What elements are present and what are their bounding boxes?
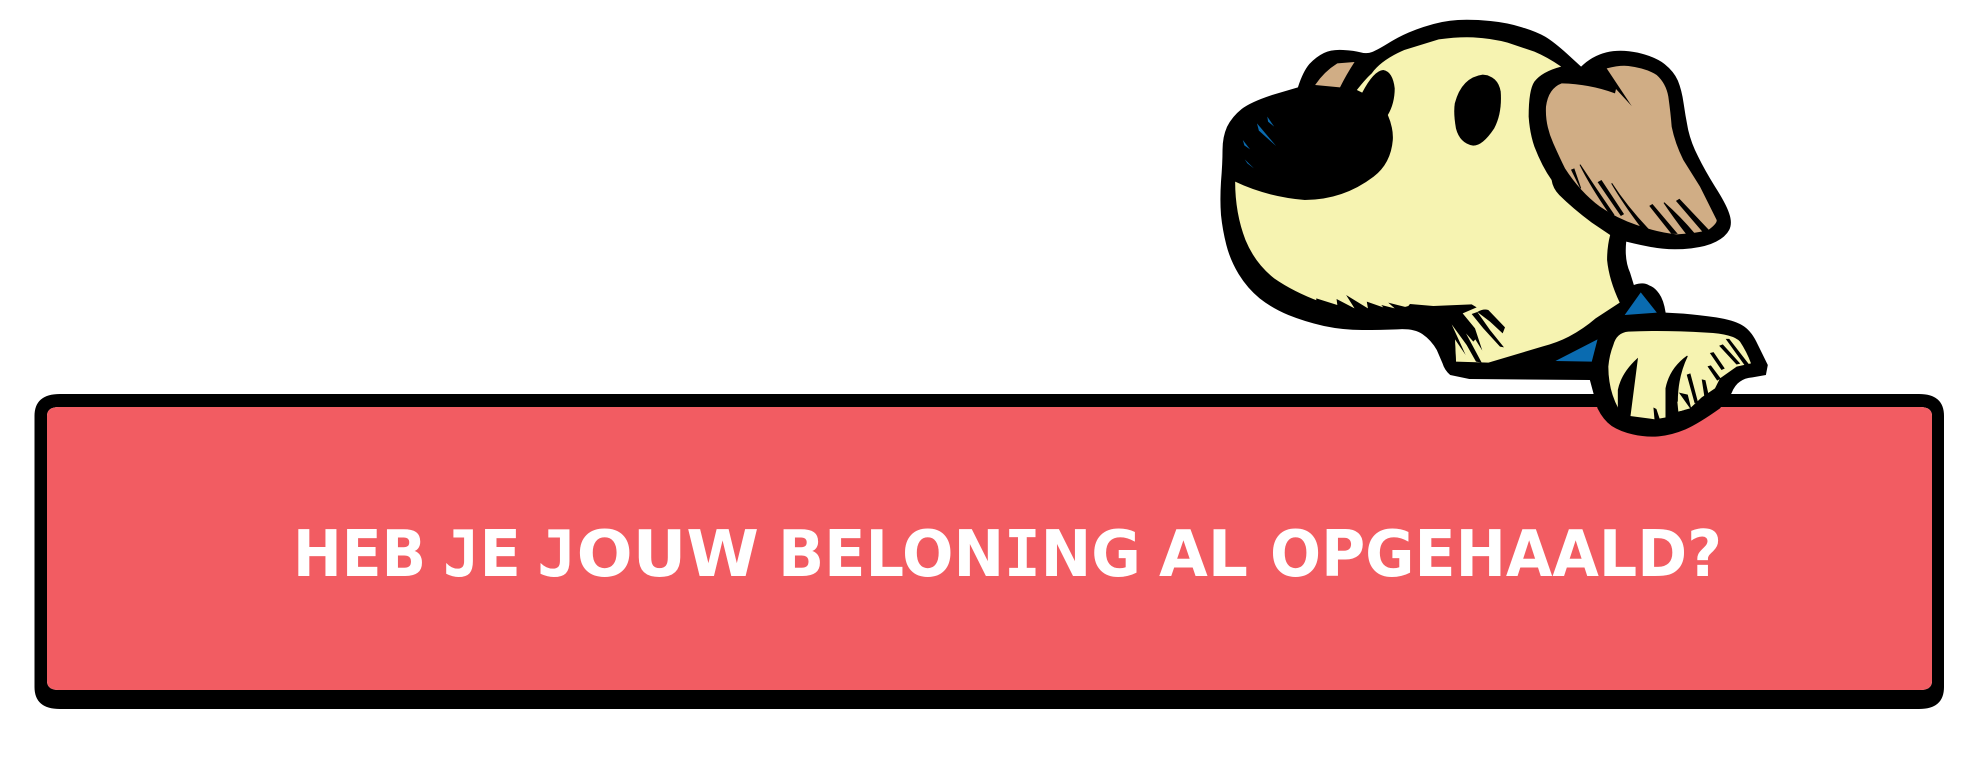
dog head cream fill [1235,37,1620,363]
big ear [1546,66,1717,234]
icon: dog peeking over the banner [1220,20,1768,437]
chin fur strokes [1400,304,1505,363]
heading: banner question: BELONING [778,518,1141,592]
blue collar triangle upper [1625,292,1657,315]
heading: banner question: JE [443,518,521,592]
paw [1608,331,1751,419]
small ear tan [1315,62,1355,87]
nose highlights [1243,117,1276,168]
dog black silhouette [1220,20,1768,437]
dog eye [1454,75,1501,146]
heading: banner question: JOUW [537,518,759,592]
big ear fur strokes [1572,165,1708,234]
heading: banner question [293,518,1722,592]
dog head [1220,20,1768,437]
paw claw strokes [1618,339,1748,419]
banner fill [47,407,1932,690]
heading: banner question: AL [1159,518,1248,592]
heading: banner question: HEB [293,518,426,592]
heading: banner question: OPGEHAALD? [1270,518,1722,592]
panel: red banner with black border [34,394,1944,709]
paw cream fill [1608,331,1751,419]
blue collar triangle lower [1555,339,1598,362]
jaw fur fringe [1316,295,1410,320]
paw cream sliver [1677,402,1684,412]
big ear tan [1546,66,1717,234]
